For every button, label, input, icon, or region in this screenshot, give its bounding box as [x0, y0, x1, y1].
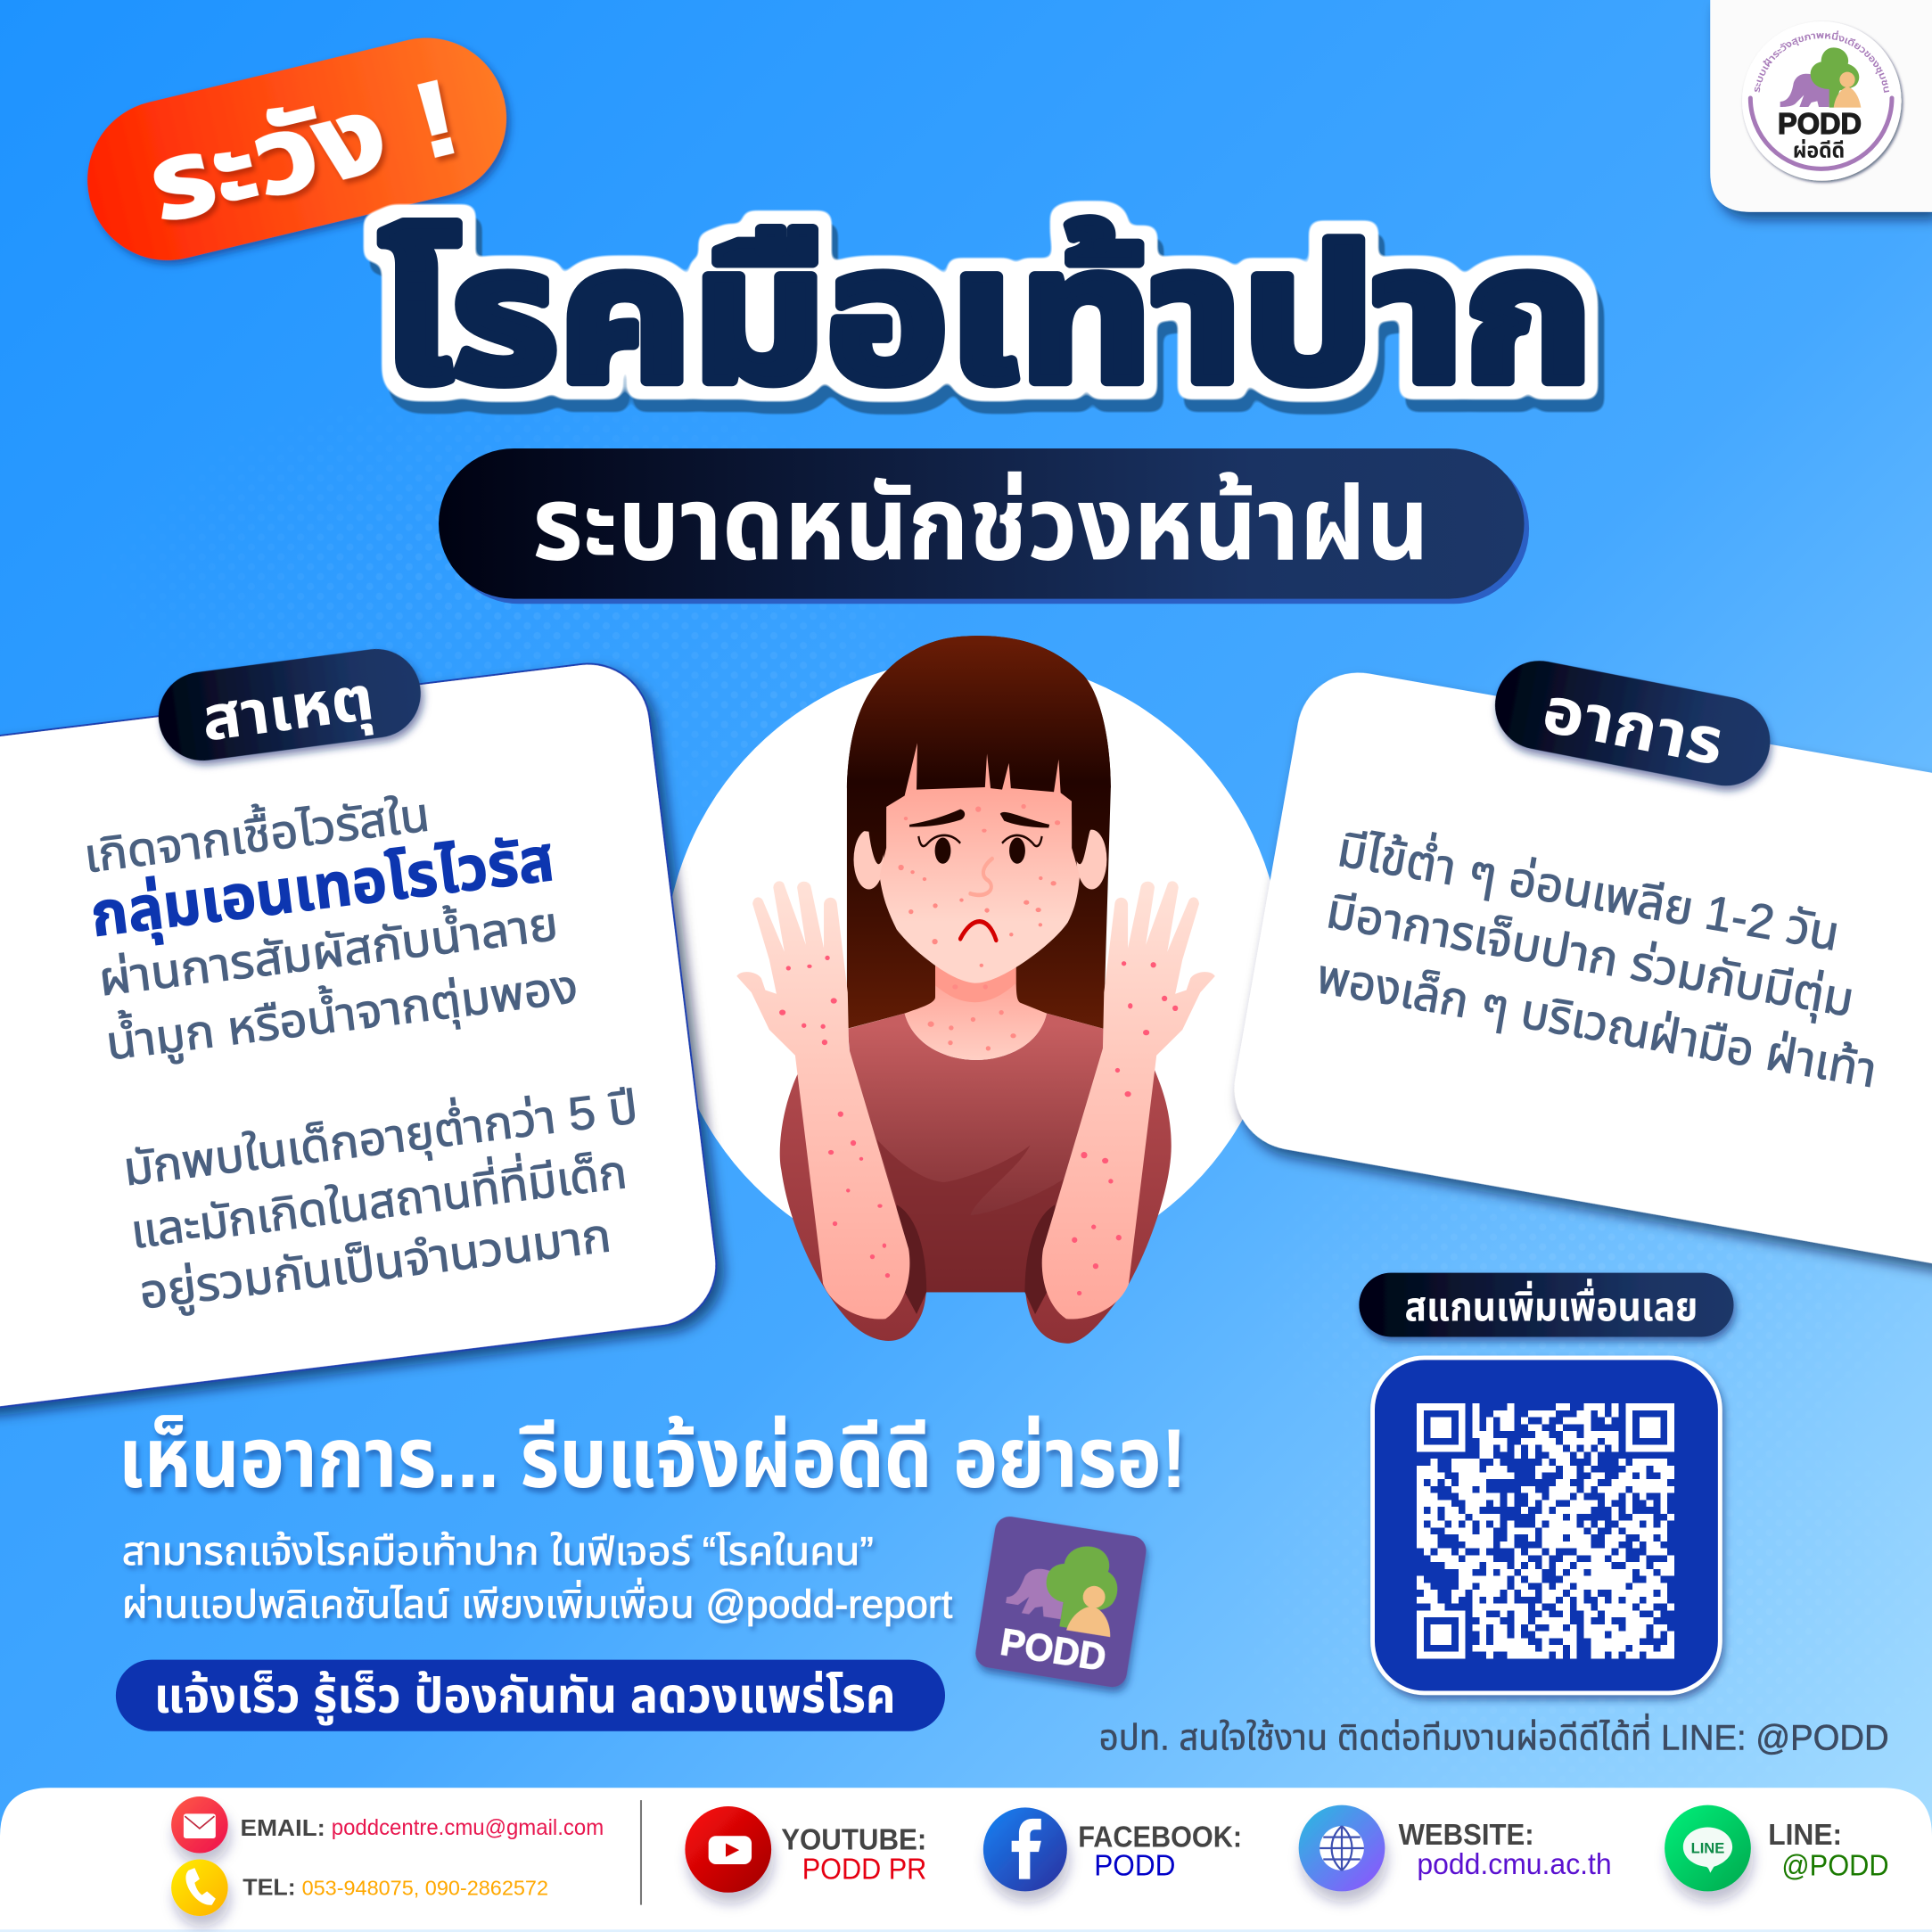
warning pill: ระวัง !: [71, 21, 523, 276]
tag: อาการ: อาการ: [1537, 674, 1730, 779]
text block: cause description: มักพบในเด็กอายุต่ำกว่า 5 ปี: [120, 1075, 641, 1197]
text block: cause description: เกิดจากเชื้อไวรัสใน: [80, 783, 432, 883]
logo: PODD round badge: PODD: [1778, 108, 1862, 141]
line contact: [1665, 1805, 1889, 1891]
text block: symptoms description: มีไข้ต่ำ ๆ อ่อนเพลีย 1-2 วัน: [1334, 817, 1845, 961]
note: contact for local government: อปท. สนใจใช้งาน ติดต่อทีมงานผ่อดีดีได้ที่ LINE: @PODD: [1099, 1713, 1889, 1757]
icon: phone: [171, 1859, 228, 1916]
face: [880, 736, 1080, 983]
text block: symptoms description: มีอาการเจ็บปาก ร่วมกับมีตุ่ม: [1322, 884, 1858, 1029]
slogan pill: แจ้งเร็ว รู้เร็ว ป้องกันทัน ลดวงแพร่โรค: [154, 1668, 896, 1726]
icon: facebook: [983, 1807, 1067, 1891]
QR code card: [1373, 1358, 1720, 1693]
telephone contact: [171, 1859, 548, 1916]
left sleeve: [780, 1067, 926, 1341]
icon: youtube: [685, 1806, 771, 1893]
neck: [905, 965, 1047, 1060]
QR code: [1417, 1403, 1674, 1658]
icon: LINE: [1665, 1805, 1751, 1891]
hair front with bangs: [847, 636, 1111, 864]
tag: สาเหตุ: [153, 644, 426, 766]
warning pill: ระวัง !: ระวัง !: [137, 57, 470, 245]
icon: email: [171, 1796, 228, 1854]
right sleeve: [1024, 1067, 1172, 1344]
text block: how to report: สามารถแจ้งโรคมือเท้าปาก ในฟีเจอร์ “โรคในคน”: [122, 1530, 874, 1574]
icon: LINE: LINE: [1691, 1840, 1724, 1857]
website contact: [1299, 1805, 1612, 1891]
nose: [970, 859, 992, 895]
text block: cause description: [80, 783, 641, 1321]
right card: symptoms: [1225, 654, 1932, 1301]
text block: symptoms description: [1313, 817, 1880, 1098]
text block: how to report: ผ่านแอปพลิเคชันไลน์ เพียงเพิ่มเพื่อน @podd-report: [122, 1578, 952, 1627]
illustration: worried girl with rash: [736, 636, 1215, 1344]
line contact: @PODD: [1781, 1849, 1889, 1882]
logo: PODD round badge: ผ่อดีดี: [1793, 138, 1845, 163]
shirt: [848, 1014, 1104, 1292]
youtube contact: [685, 1806, 926, 1893]
text block: how to report: [122, 1530, 952, 1627]
youtube contact: PODD PR: [802, 1854, 926, 1887]
title: โรคมือเท้าปาก: โรคมือเท้าปาก: [380, 210, 1593, 422]
icon: PODD app: [974, 1515, 1148, 1689]
facebook contact: PODD: [1094, 1849, 1175, 1882]
elbow shadows: [897, 1204, 926, 1314]
subtitle pill: ระบาดหนักช่วงหน้าฝน: [439, 448, 1529, 604]
tag: อาการ: [1487, 654, 1778, 793]
text block: cause description: และมักเกิดในสถานที่ที่มีเด็ก: [127, 1140, 629, 1259]
website contact: WEBSITE:: [1399, 1819, 1534, 1852]
text block: cause description: ผ่านการสัมผัสกับน้ำลาย: [95, 892, 561, 1007]
tag: scan: สแกนเพิ่มเพื่อนเลย: [1404, 1278, 1698, 1330]
icon: PODD app: PODD: [998, 1621, 1109, 1680]
mouth: [960, 922, 996, 941]
right arm and hand: [1042, 881, 1215, 1320]
facebook contact: [983, 1807, 1242, 1891]
email contact: poddcentre.cmu@gmail.com: [332, 1815, 604, 1840]
logo: PODD round badge: ระบบเฝ้าระวังสุขภาพหนึ่งเดียวของชุมชน: [1755, 30, 1890, 93]
facebook contact: FACEBOOK:: [1078, 1821, 1242, 1854]
white circle behind character: [664, 658, 1283, 1277]
website contact: podd.cmu.ac.th: [1417, 1848, 1612, 1881]
youtube contact: YOUTUBE:: [781, 1823, 926, 1856]
logo card: [1706, 0, 1932, 228]
line contact: LINE:: [1768, 1819, 1842, 1852]
text block: cause description: กลุ่มเอนเทอโรไวรัส: [86, 824, 558, 952]
rash spots: [899, 804, 1060, 1050]
subtitle pill: ระบาดหนักช่วงหน้าฝน: ระบาดหนักช่วงหน้าฝน: [532, 465, 1429, 581]
email contact: [171, 1796, 604, 1854]
left card: causes: [0, 644, 723, 1415]
hair back: [847, 636, 1111, 1029]
ears: [854, 830, 884, 890]
text block: cause description: น้ำมูก หรือน้ำจากตุ่มพอง: [103, 955, 580, 1072]
tag: สาเหตุ: สาเหตุ: [198, 662, 378, 757]
telephone contact: TEL:: [243, 1874, 296, 1901]
email contact: EMAIL:: [240, 1814, 325, 1841]
icon: globe: [1299, 1805, 1385, 1891]
left arm and hand: [736, 881, 909, 1320]
heading: see symptoms, report: เห็นอาการ... รีบแจ้งผ่อดีดี อย่ารอ!: [119, 1411, 1187, 1505]
eyes: [935, 838, 950, 864]
telephone contact: 053-948075, 090-2862572: [302, 1877, 548, 1900]
tag: scan: [1359, 1273, 1733, 1336]
eyebrows: [909, 810, 965, 827]
text block: symptoms description: พองเล็ก ๆ บริเวณฝ่ามือ ฝ่าเท้า: [1313, 950, 1880, 1098]
footer panel: [0, 1788, 1932, 1932]
text block: cause description: อยู่รวมกันเป็นจำนวนมาก: [136, 1209, 614, 1321]
logo: PODD round badge: [1741, 21, 1905, 185]
